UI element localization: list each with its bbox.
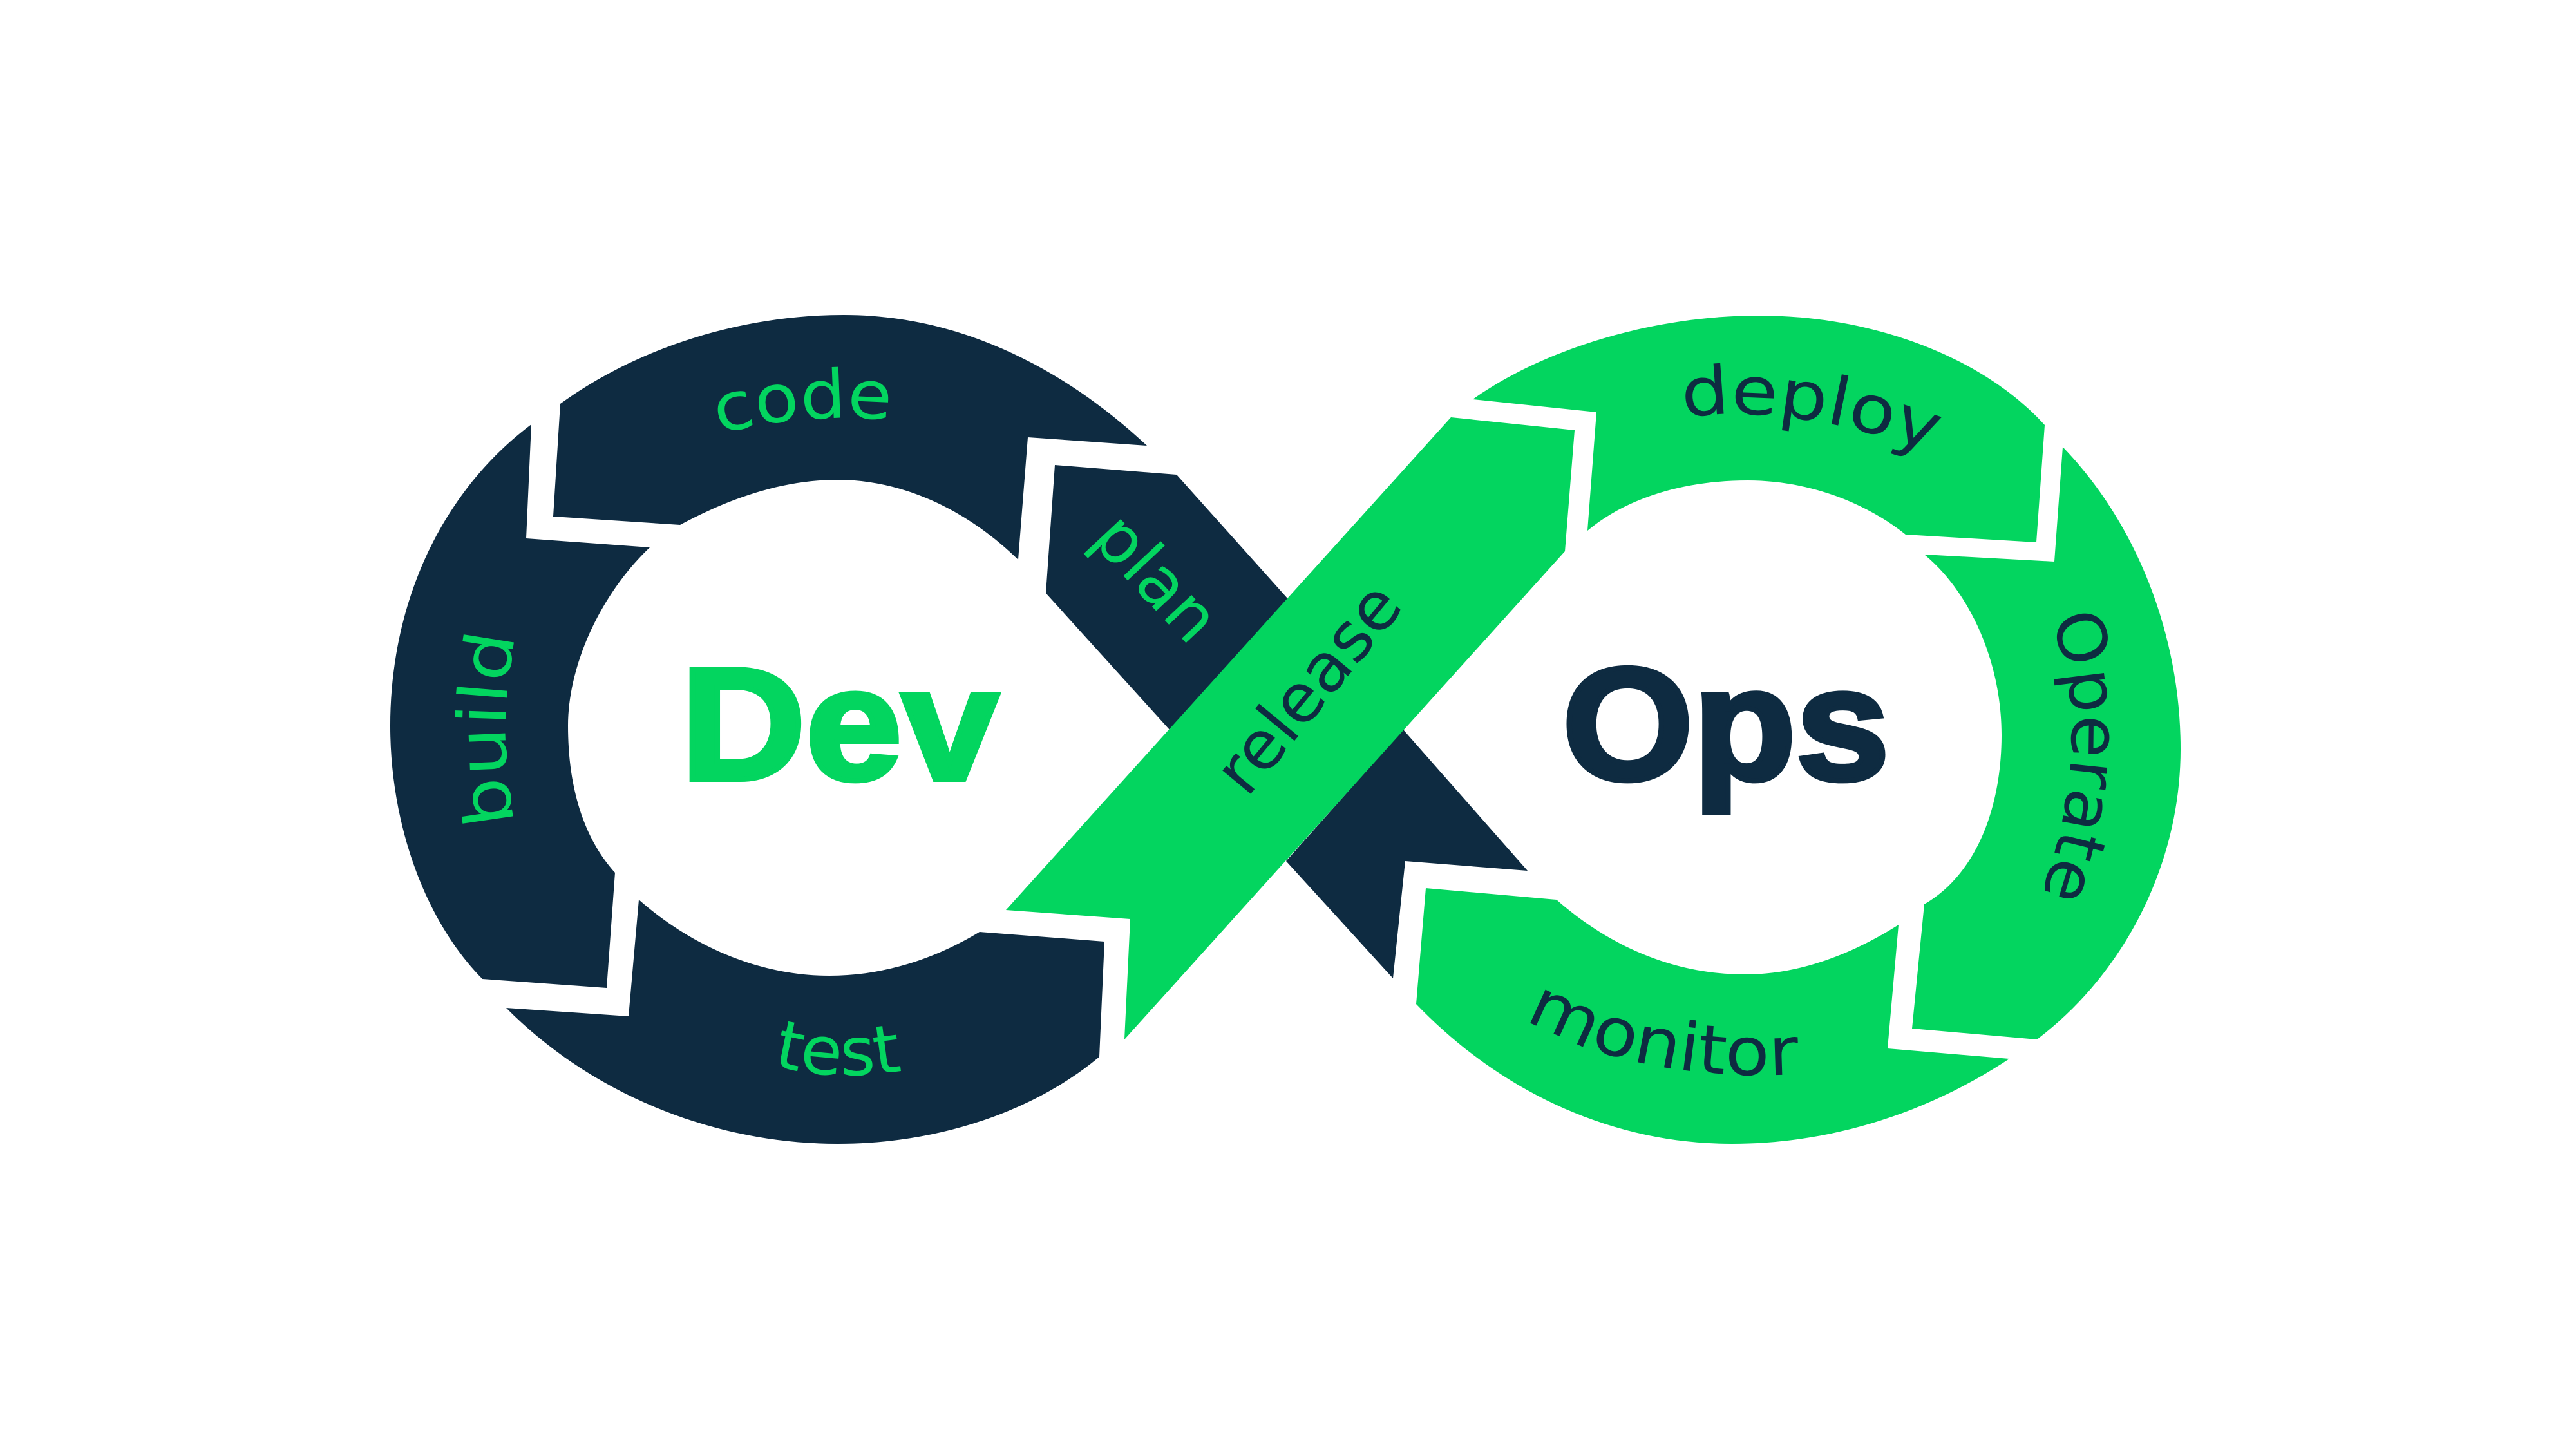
segment: code: code xyxy=(717,367,889,430)
segment: code xyxy=(553,315,1147,560)
segment: operate: Operate xyxy=(2045,613,2110,898)
segment: test xyxy=(506,900,1104,1144)
heading: Ops: Ops xyxy=(1562,634,1889,813)
segment: monitor xyxy=(1416,888,2009,1144)
segment: release xyxy=(1006,417,1575,1039)
segment: plan xyxy=(1046,465,1287,729)
segment: build: build xyxy=(455,634,514,824)
segment: deploy xyxy=(1473,316,2045,542)
segment: deploy: deploy xyxy=(1685,363,1942,456)
segment: release: release xyxy=(1222,593,1400,794)
segment: plan: plan xyxy=(1083,519,1208,643)
panel: ops loop xyxy=(1006,316,2181,1144)
segment: monitor: monitor xyxy=(1530,989,1798,1076)
segment: test: test xyxy=(781,1021,901,1076)
segment: build xyxy=(390,424,650,988)
heading: Dev: Dev xyxy=(681,634,998,813)
segment: operate xyxy=(1912,447,2181,1039)
lower crossing band xyxy=(1286,730,1528,978)
panel: dev loop xyxy=(390,315,1287,1144)
